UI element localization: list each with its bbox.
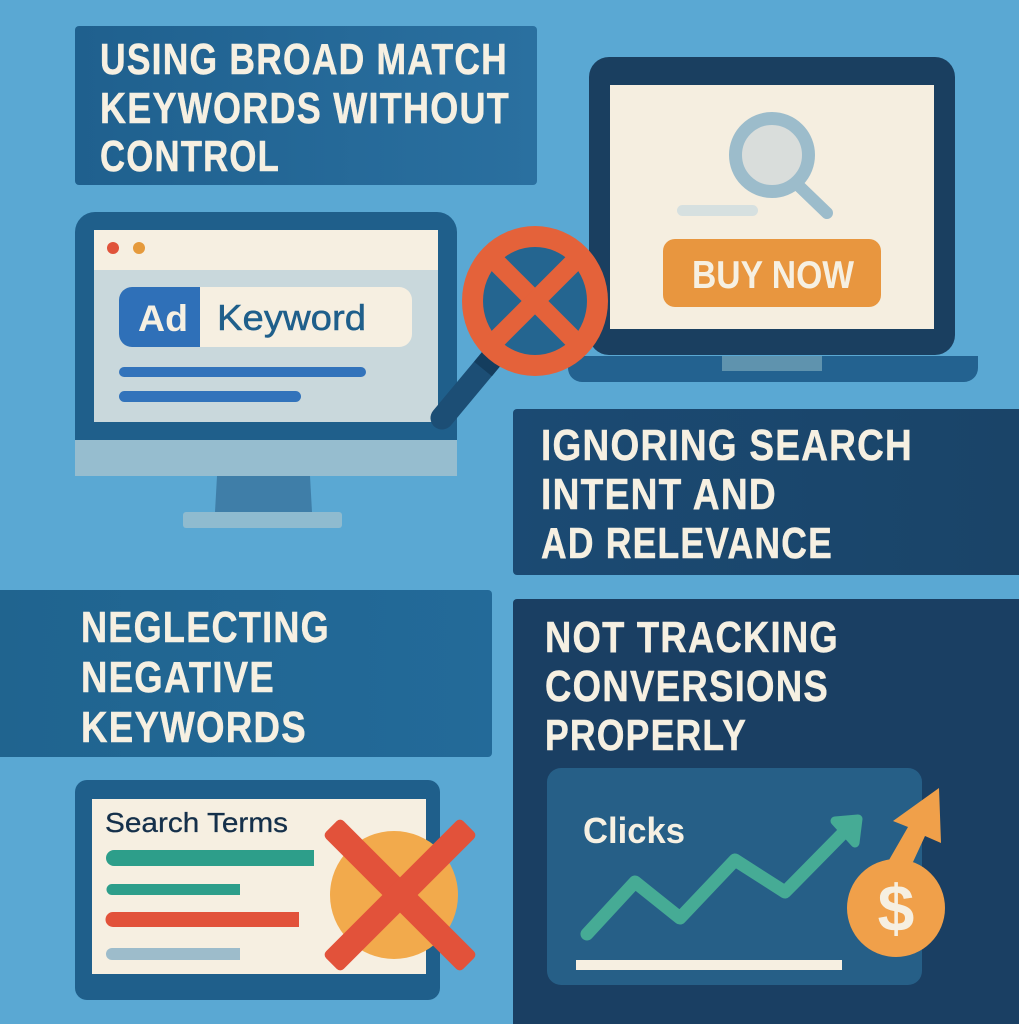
panel: heading broad match keywords [75, 26, 537, 185]
icon: search magnifier [736, 118, 827, 213]
buy now button: BUY NOW [692, 254, 854, 297]
panel: heading search intent [513, 409, 1019, 575]
heading text: not tracking conversions [545, 613, 839, 760]
heading text: neglecting negative keywords: NEGLECTING [81, 603, 330, 652]
icon: desktop monitor with ad keyword [75, 212, 457, 528]
search term bars [106, 850, 314, 960]
heading text: using broad match: CONTROL [100, 132, 280, 181]
heading text: ignoring search intent: INTENT AND [541, 470, 777, 519]
red cross [323, 818, 477, 972]
ad keyword pill: Ad [138, 298, 188, 339]
heading text: neglecting negative keywords [81, 603, 330, 752]
chart: clicks trend [547, 768, 922, 985]
heading text: ignoring search intent: IGNORING SEARCH [541, 421, 913, 470]
icon: crossed-out magnifier [442, 226, 608, 418]
buy now button [663, 239, 881, 307]
ad keyword pill [119, 287, 412, 347]
icon: search terms window: Search Terms [105, 807, 288, 838]
heading text: not tracking conversions: NOT TRACKING [545, 613, 839, 662]
heading text: ignoring search intent [541, 421, 913, 568]
ad keyword pill: Keyword [217, 297, 366, 338]
heading text: neglecting negative keywords: NEGATIVE [81, 653, 275, 702]
icon: search terms window [75, 780, 477, 1000]
icon: laptop with buy now button [568, 57, 978, 382]
icon: dollar coin with arrow: $ [878, 871, 914, 945]
heading text: using broad match: USING BROAD MATCH [100, 35, 508, 84]
heading text: using broad match [100, 35, 510, 181]
icon: dollar coin with arrow [847, 788, 945, 957]
heading text: neglecting negative keywords: KEYWORDS [81, 703, 307, 752]
heading text: not tracking conversions: PROPERLY [545, 711, 747, 760]
heading text: not tracking conversions: CONVERSIONS [545, 662, 829, 711]
chart: clicks trend: Clicks [583, 810, 685, 851]
panel: heading negative keywords [0, 590, 492, 757]
heading text: using broad match: KEYWORDS WITHOUT [100, 84, 510, 133]
panel: heading tracking conversions [513, 599, 1019, 1024]
heading text: ignoring search intent: AD RELEVANCE [541, 519, 833, 568]
